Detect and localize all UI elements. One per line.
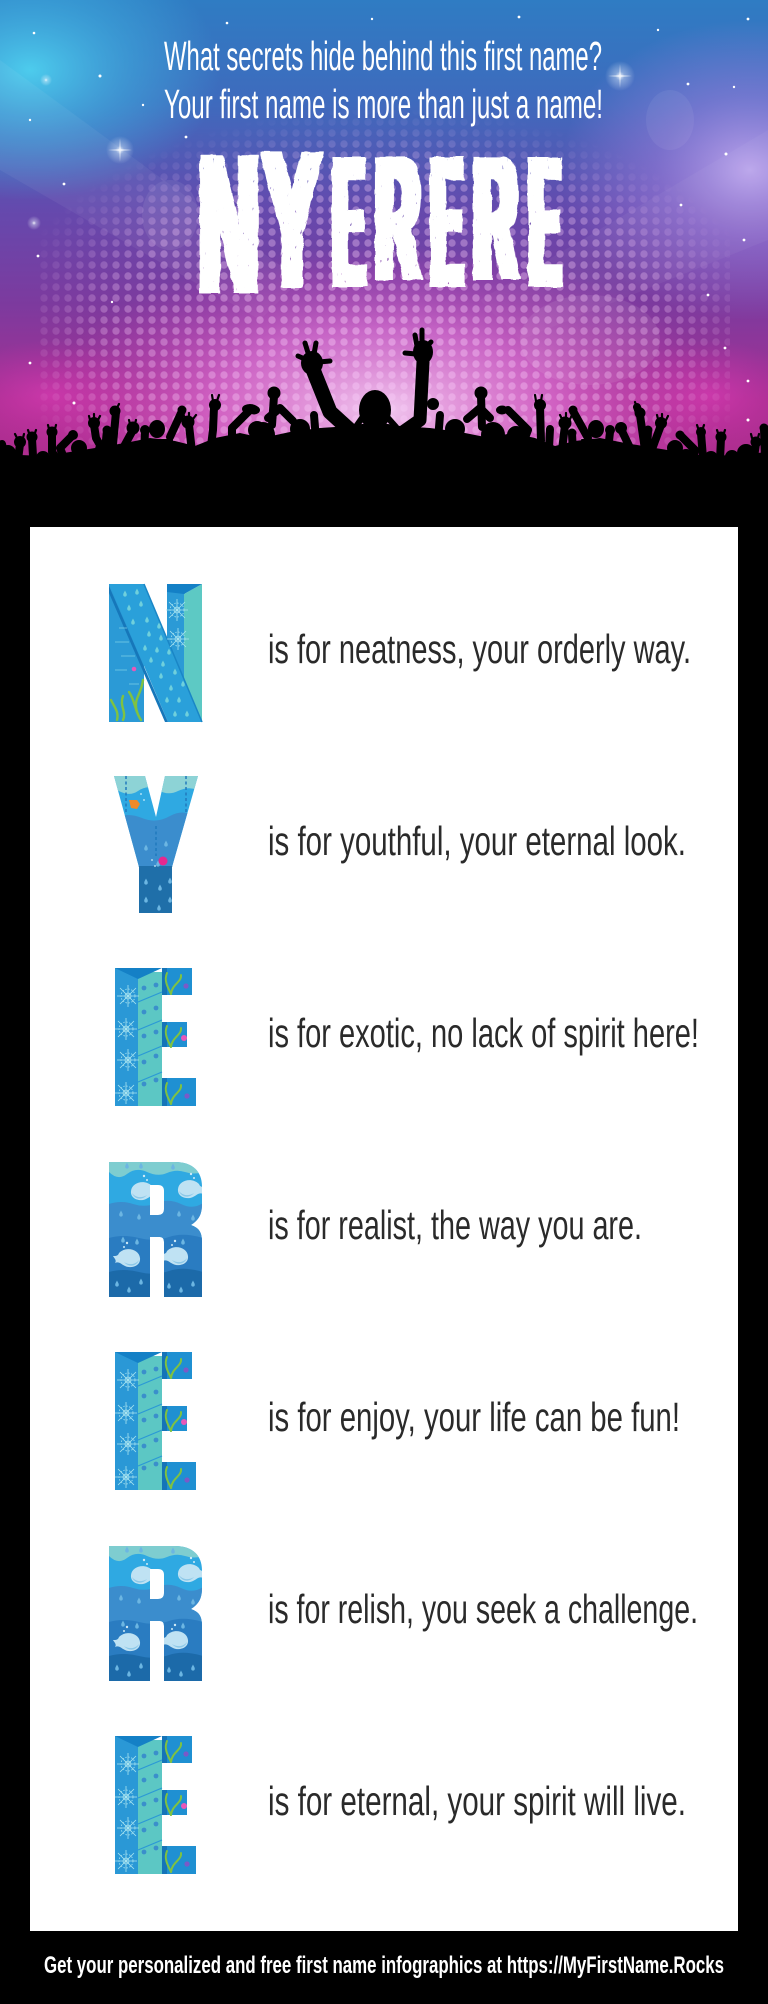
- name heading: E: [530, 118, 559, 326]
- sparkling stars: [27, 16, 750, 421]
- right crowd: [508, 407, 765, 460]
- white content panel: [30, 527, 738, 1931]
- name heading: [199, 111, 559, 335]
- row 3: icon letter E: [115, 968, 196, 1106]
- row 2: icon letter Y: [114, 776, 198, 913]
- tagline: [164, 33, 603, 127]
- concert hero background: [0, 0, 768, 456]
- row 4: icon letter R: [109, 1162, 205, 1297]
- name heading: Y: [264, 111, 320, 328]
- name heading: E: [432, 118, 461, 326]
- name heading: R: [376, 119, 419, 317]
- centre-flanking figures: [268, 396, 490, 440]
- left crowd: [2, 407, 250, 460]
- row 7: icon letter E: [115, 1736, 196, 1874]
- row 5: icon letter E: [115, 1352, 196, 1490]
- row 6: icon letter R: [109, 1546, 205, 1681]
- row 1: icon letter N: [109, 584, 202, 722]
- name heading: N: [199, 115, 259, 335]
- name heading: E: [334, 118, 363, 326]
- name heading: R: [474, 119, 517, 317]
- crowd silhouette: [0, 330, 768, 527]
